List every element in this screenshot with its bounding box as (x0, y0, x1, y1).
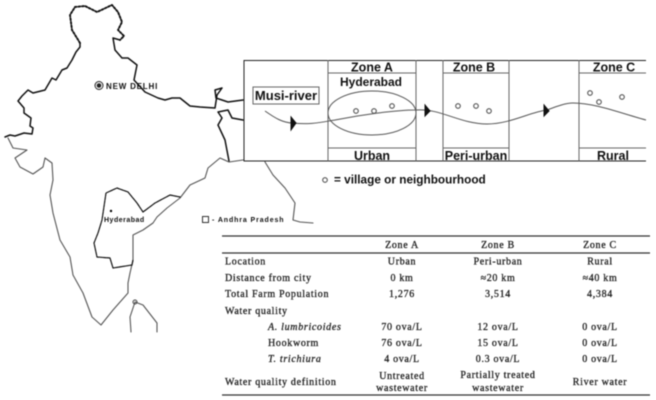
zone diagram (244, 60, 646, 163)
map of India (5, 5, 313, 332)
Sri Lanka (130, 302, 157, 332)
row: hookworm: 15 ova/L (477, 338, 519, 349)
row: A. lumbricoides: 0 ova/L (582, 322, 618, 333)
row: location (225, 256, 613, 268)
row: population: 1,276 (389, 289, 415, 300)
row: location: Location (225, 256, 266, 268)
coastline (8, 138, 313, 325)
row: A. lumbricoides: A. lumbricoides (267, 322, 342, 333)
row: location: Rural (587, 256, 613, 268)
row: water quality definition: Partially treated (460, 370, 536, 381)
row: hookworm: 0 ova/L (582, 338, 618, 349)
row: distance: Distance from city (225, 273, 312, 284)
table header: Zone B (481, 240, 515, 251)
north-west border (5, 43, 80, 137)
zone headings: Zone C (593, 60, 635, 74)
row: water quality definition: wastewater (376, 383, 428, 394)
row: location: Peri-urban (473, 256, 523, 268)
row: T. trichiura: 0 ova/L (582, 354, 618, 365)
north-east border (113, 38, 243, 161)
row: T. trichiura: 0.3 ova/L (476, 354, 520, 365)
river with flow arrows (265, 103, 646, 130)
row: water quality: Water quality (225, 306, 288, 317)
data table (222, 236, 650, 395)
Hyderabad city ellipse (328, 91, 416, 135)
row: distance: 0 km (390, 273, 414, 284)
Musi-river label: Musi-river (255, 88, 317, 103)
row: water quality definition: River water (573, 377, 627, 388)
label: Hyderabad on map (104, 210, 145, 224)
legend: Andhra Pradesh: - Andhra Pradesh (212, 217, 284, 224)
row: A. lumbricoides: 70 ova/L (381, 322, 423, 333)
zone headings: Rural (597, 149, 629, 163)
row: distance: ≈40 km (583, 273, 617, 284)
zone headings: Zone B (453, 60, 495, 74)
row: water quality definition: Water quality definition (225, 377, 337, 388)
row: water quality definition: Untreated (379, 371, 425, 382)
row: T. trichiura: T. trichiura (268, 354, 322, 365)
row: population: 4,384 (587, 289, 613, 300)
row: population: 3,514 (485, 289, 511, 300)
zone headings (340, 60, 635, 163)
row: T. trichiura: 4 ova/L (384, 354, 420, 365)
table header (385, 240, 617, 251)
row: hookworm (268, 338, 618, 349)
table header: Zone C (583, 240, 617, 251)
label: Hyderabad on map: Hyderabad (104, 217, 145, 224)
row: location: Urban (388, 256, 416, 268)
legend: village or neighbourhood: = village or neighbourhood (334, 172, 486, 186)
label: New Delhi: NEW DELHI (106, 82, 158, 91)
zone headings: Peri-urban (445, 149, 507, 163)
row: population: Total Farm Population (225, 289, 329, 300)
row: population (225, 289, 613, 300)
Andhra Pradesh border (94, 188, 180, 268)
row: water quality definition (225, 370, 627, 394)
village markers (354, 91, 624, 113)
zone headings: Urban (354, 149, 390, 163)
row: A. lumbricoides (267, 322, 618, 333)
row: A. lumbricoides: 12 ova/L (477, 322, 519, 333)
row: water quality definition: wastewater (472, 383, 524, 394)
row: hookworm: 76 ova/L (381, 338, 423, 349)
row: distance (225, 273, 617, 284)
table header: Zone A (385, 240, 419, 251)
row: distance: ≈20 km (481, 273, 515, 284)
zone headings: Zone A (351, 60, 393, 74)
row: T. trichiura (268, 354, 618, 365)
row: hookworm: Hookworm (268, 338, 319, 349)
zone headings: Hyderabad (340, 75, 402, 89)
northern dotted border (70, 5, 124, 43)
